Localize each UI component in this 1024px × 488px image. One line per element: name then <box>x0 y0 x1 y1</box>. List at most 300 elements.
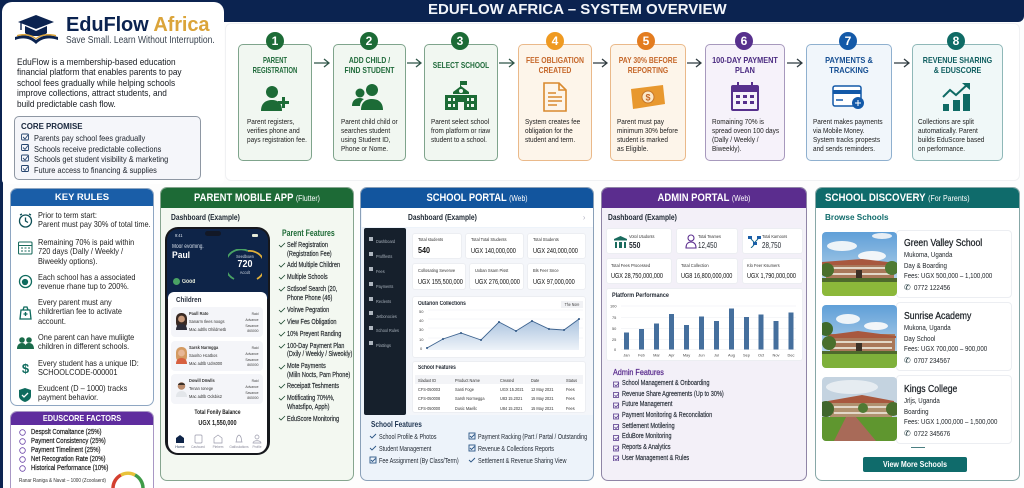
parent feature list: Self Registration <box>287 242 328 249</box>
rule 6 <box>38 358 139 377</box>
school 1 phone: 0772 122456 <box>914 283 950 292</box>
child 2 text: Mac adtlb UdIs000 <box>189 361 222 366</box>
rule 2: 720 days (Dally / Weekly / <box>38 246 123 256</box>
bars and axes: Sep <box>743 352 750 358</box>
column 2: Product Name <box>455 378 480 383</box>
phone notch <box>205 231 221 236</box>
sidebar menu: Dashboard <box>376 239 395 244</box>
bars and axes: 75 <box>612 315 616 320</box>
kpi: total collection: Total Collection <box>681 264 709 269</box>
kpi: collecting revenue <box>412 263 466 290</box>
child 1 amounts: Raid <box>252 311 259 316</box>
browse label: Browse Schools <box>825 212 889 222</box>
step 6 <box>705 32 785 161</box>
core promise heading: CORE PROMISE <box>21 121 83 131</box>
status time: 9:41 <box>175 233 182 238</box>
line chart <box>412 296 586 358</box>
child 2 amounts <box>246 345 259 368</box>
sidebar menu: School Rules <box>376 328 399 333</box>
step 6: 100-DAY PAYMENT <box>712 55 778 65</box>
rule 7 <box>38 384 127 403</box>
dashboard label: Dashboard (Example) <box>408 212 477 222</box>
child 1 amounts: Advance <box>246 317 259 322</box>
school 2 text: Mukona, Uganda <box>904 323 951 332</box>
admin heading: ADMIN PORTAL (Web) <box>658 192 750 204</box>
dashboard label: Dashboard (Example) <box>171 212 240 222</box>
bottom navigation: Plebem <box>213 445 224 449</box>
step 1: REGISTRATION <box>253 65 297 75</box>
school features column 2: Settlement & Revenue Sharing View <box>478 456 566 465</box>
step 6: Romaining 70% is <box>712 117 764 126</box>
kpi: fee kaumers: UGX 1,790,000,000 <box>747 272 796 280</box>
parent feature list: 100-Day Payment Plan <box>287 343 344 350</box>
child 1 text: Sanarm Ilees noogs <box>189 319 224 324</box>
bottom navigation <box>171 432 265 452</box>
sidebar menu: Proflfests <box>376 254 392 259</box>
rule 1: Prior to term start: <box>38 210 97 220</box>
child 1 amounts <box>246 311 259 334</box>
kpi: total collection <box>676 258 738 284</box>
step 7: PAYMENTS & <box>825 55 873 65</box>
bars and axes: 25 <box>612 337 616 342</box>
parent feature list: Volrwe Pegration <box>287 307 329 314</box>
rule 3: revenue rhane tup to 200%. <box>38 281 129 291</box>
icon: document <box>543 82 567 112</box>
step 7: and sends reminders. <box>813 144 875 153</box>
admin features list: Reports & Analytics <box>622 444 671 451</box>
chevron: › <box>583 213 585 222</box>
step 8: on performance. <box>918 144 965 153</box>
admin features list: User Management & Rules <box>622 455 689 462</box>
bars and axes: Jun <box>698 352 705 358</box>
step 6: 6 <box>741 34 747 48</box>
step 1: verifies phone and <box>247 126 300 135</box>
greeting: Moor evoming. <box>172 244 204 250</box>
intro text: improve collections, attract students, and <box>17 88 167 98</box>
kpi: schools: Votol Utudonts <box>629 234 654 239</box>
intro text: school fees gradually while helping schools <box>17 78 175 88</box>
bar chart <box>606 288 803 361</box>
school 2 text: Sunrise Academy <box>904 311 971 322</box>
icon: school building <box>445 81 477 110</box>
dashboard bar <box>362 208 593 227</box>
column 3: U84 15.2021 <box>500 406 522 411</box>
dashboard label: Dashboard (Example) <box>608 212 677 222</box>
core promise list: Schools receive predictable collections <box>34 144 161 154</box>
icon: check boxes <box>21 134 29 172</box>
school portal heading: SCHOOL PORTAL (Web) <box>426 192 527 204</box>
kpi: fee kaumers: Klo Feer Ksumers <box>747 264 780 269</box>
bars and axes: Aug <box>728 352 735 358</box>
step 2: FIND STUDENT <box>345 65 394 75</box>
eduscore heading <box>11 412 153 425</box>
parent feature list: Add Multiple Children <box>287 262 340 269</box>
photo: kings college <box>822 377 897 441</box>
factor list: Despslt Comaltance (25%) <box>31 429 101 436</box>
school 3 text: Fees: UGX 1,000,000 – 1,500,000 <box>904 417 997 426</box>
child 3 amounts: Savance <box>246 390 259 395</box>
factor list: Payment Consistency (25%) <box>31 438 106 445</box>
child card 1 <box>171 307 263 337</box>
parent feature list: Multiple Schools <box>287 274 328 281</box>
kpi: fee since: UGX 97,000,000 <box>533 277 575 286</box>
chart title: Outarion Collections <box>418 301 466 307</box>
step 2: using Student ID, <box>341 135 391 144</box>
rule 3 <box>38 272 136 291</box>
icon: calendar <box>731 82 759 111</box>
school features column 2: Payment Racking (Part / Partal / Outstanding <box>478 432 587 441</box>
kpi: fee since <box>527 263 586 290</box>
bars and axes: Nov <box>773 352 780 358</box>
feature check marks <box>278 241 286 421</box>
kpi: total students value: Total Total Students <box>471 238 507 243</box>
sidebar icons <box>369 237 374 347</box>
parent feature list: 10% Preyent Randing <box>287 331 341 338</box>
step 7: System tracks propests <box>813 135 880 144</box>
table title: School Features <box>418 365 456 371</box>
kpi: collecting revenue: UGX 155,500,000 <box>418 277 463 286</box>
step 6: spread oveon 100 days <box>712 126 779 135</box>
step 5: as Eligible. <box>617 144 648 153</box>
panel: school discovery <box>815 187 1020 481</box>
column 4 <box>531 376 554 413</box>
rule 4: account. <box>38 316 66 326</box>
kpi: kamoors: Total Karnoors <box>762 234 787 239</box>
school 2 text: Day School <box>904 334 935 342</box>
rule 1 <box>38 210 151 229</box>
family balance: Total Fonily Balance <box>195 409 240 416</box>
eduscore heading: EDUSCORE FACTORS <box>43 413 121 423</box>
avatar 3 <box>175 380 188 397</box>
child 2 text <box>189 344 222 368</box>
bars and axes: Mar <box>653 352 661 358</box>
kpi: urban pool <box>469 263 524 290</box>
child 2 amounts: Savance <box>246 357 259 362</box>
step 5: 5 <box>643 34 649 48</box>
step 7: Parent makes payments <box>813 117 883 126</box>
phone screen top <box>167 229 268 299</box>
column 4: 15 May 2021 <box>531 406 554 411</box>
discovery heading: SCHOOL DISCOVERY (For Parents) <box>825 192 970 204</box>
column 3: Created <box>500 378 514 383</box>
bottom navigation: Home <box>175 445 185 449</box>
child 2 amounts: Raid <box>252 345 259 350</box>
rule 5: children in different schools. <box>38 341 129 351</box>
admin features list: EduBore Monitoring <box>622 433 672 440</box>
step 2: searches student <box>341 126 390 135</box>
step 5: student is marked <box>617 135 668 144</box>
panel: core promise <box>14 116 201 180</box>
left edge strip <box>0 0 3 488</box>
parent feature list: Receipatt Teshments <box>287 383 339 390</box>
child card 3 <box>171 374 263 404</box>
core promise list <box>34 133 168 174</box>
step 1: pays registration fee. <box>247 135 307 144</box>
key rules heading: KEY RULES <box>55 192 109 203</box>
step 1: Parent registers, <box>247 117 294 126</box>
panel: parent mobile app <box>160 187 354 481</box>
rule 3: Each school has a associated <box>38 272 136 282</box>
child 3 text: Mac adtlb Odsbis2 <box>189 394 222 399</box>
children heading: Children <box>176 295 201 304</box>
child 3 text: Dowill Döwlls <box>189 378 215 383</box>
child 2 text: Saorito Hcatbos <box>189 353 217 358</box>
step 2: 2 <box>366 34 372 48</box>
view more button <box>863 457 967 472</box>
school 3 text: Jrljs, Uganda <box>904 396 940 405</box>
step 8: REVENUE SHARING <box>923 55 992 65</box>
area line graph <box>413 303 587 353</box>
child 3 amounts <box>246 378 259 401</box>
step 2 <box>333 32 406 161</box>
admin features list: Future Management <box>622 401 672 408</box>
school 3 text: Kings College <box>904 384 957 395</box>
icon: revenue share <box>18 274 32 288</box>
photo: green valley <box>822 232 897 296</box>
kpi: teachers: Total Teames <box>698 234 721 239</box>
area line graph: 40 <box>419 318 424 323</box>
parent feature list: View Fes Obligation <box>287 319 337 326</box>
school 3 phone: 0722 345676 <box>914 429 950 438</box>
kpi: schools: 550 <box>629 241 640 250</box>
child 3 amounts: Advance <box>246 384 259 389</box>
rule 2: Biweekly options). <box>38 256 97 266</box>
icon: clock <box>18 213 32 228</box>
area line graph: 30 <box>419 327 424 332</box>
school 1 text: Day & Boarding <box>904 260 947 270</box>
title bar <box>0 0 1024 22</box>
step 1: PARENT <box>263 55 287 65</box>
rule 6: Every student has a unique ID: <box>38 358 139 368</box>
area line graph: 50 <box>419 309 424 314</box>
step 4: student and term. <box>525 135 575 144</box>
panel: key rules <box>10 188 154 406</box>
content area <box>407 228 593 415</box>
bars and axes: 50 <box>612 326 617 331</box>
bars and axes: Jan <box>623 352 630 358</box>
kpi: total students value: UGX 140,000,000 <box>471 246 516 255</box>
bottom navigation: Gatliculations <box>229 445 249 449</box>
kpi: schools <box>606 228 672 254</box>
school features column 1: Student Management <box>379 444 431 453</box>
chart filter: The Nore <box>565 302 579 307</box>
child 1 text: Paull Rato <box>189 311 208 316</box>
step 5: minimum 30% before <box>617 126 678 135</box>
child 2 amounts: Advance <box>246 351 259 356</box>
admin features heading: Admin Features <box>613 368 664 377</box>
bars and axes <box>606 289 802 361</box>
icon: network <box>748 235 761 248</box>
kpi: total collection: UG8 16,800,000,000 <box>681 272 732 280</box>
rule 5: One parent can have muliigte <box>38 332 134 342</box>
rule 5 <box>38 332 134 351</box>
sidebar menu: Payments <box>376 284 393 289</box>
icon: banknote: $ <box>645 92 651 102</box>
school 1 text: Fees: UGX 500,000 – 1,100,000 <box>904 271 992 280</box>
icon: calendar <box>18 242 33 254</box>
phone screen lower <box>168 292 267 453</box>
child 1 text: Mac adtlls Ohildmetb <box>189 327 226 332</box>
school features heading: School Features <box>371 419 422 429</box>
admin heading <box>602 188 806 208</box>
kpi: collecting revenue: Collosating Sevenve <box>418 269 455 274</box>
factor list <box>31 428 108 473</box>
brand name: EduFlow Africa <box>66 14 209 36</box>
step 8: Collections are split <box>918 117 974 126</box>
admin features list <box>622 379 724 464</box>
column 1: CFS-050003 <box>418 387 440 392</box>
panel: brand and intro <box>2 2 224 184</box>
rule 2 <box>38 237 134 266</box>
sidebar <box>364 228 406 415</box>
kpi: kamoors <box>742 228 803 254</box>
icon: graduation cap and book logo <box>15 15 58 44</box>
step 2: ADD CHILD / <box>349 55 390 65</box>
step 1: 1 <box>272 34 278 48</box>
child 1 amounts: 865000 <box>248 328 259 333</box>
step 3 <box>424 32 498 161</box>
score value: 720 <box>237 259 253 270</box>
kpi: total fees: UGX 240,000,000 <box>533 246 578 255</box>
kpi: teachers: 12,450 <box>698 241 717 250</box>
avatar 1 <box>175 313 188 330</box>
step 5: Parent must pay <box>617 117 664 126</box>
step 2: Parent child child or <box>341 117 398 126</box>
rule 7: payment behavior. <box>38 392 98 402</box>
rule 4: Every parent must any <box>38 297 112 307</box>
kpi: total fees: Total Students <box>533 238 559 243</box>
icon: growth chart <box>942 83 970 111</box>
parent feature list: Motificating 70%%, <box>287 395 334 402</box>
rule 6: SCHOOLCODE-000001 <box>38 367 117 377</box>
area line graph: 0 <box>420 346 423 351</box>
good status: Good <box>182 279 195 285</box>
parent feature list: Whatsfipo, Apph) <box>287 404 330 411</box>
admin features list: Settlement Motilering <box>622 423 675 430</box>
view more button: View More Schools <box>883 460 947 469</box>
arrow <box>687 58 702 68</box>
column 1 <box>418 376 440 413</box>
step 1 <box>238 32 312 161</box>
school 2 phone: 0707 234567 <box>914 356 950 365</box>
step 3: 3 <box>457 34 463 48</box>
sidebar menu <box>376 235 399 354</box>
core promise list: Future access to financing & supplies <box>34 164 157 174</box>
bars and axes: Oct <box>758 352 765 358</box>
icon: banknote <box>631 85 665 109</box>
kpi: fees processed <box>606 258 672 284</box>
intro text: financial platform that enables parents to pay <box>17 67 182 77</box>
icon: family <box>17 337 34 349</box>
user name: Paul <box>172 250 190 261</box>
column 5: Fees <box>566 406 575 411</box>
step 4: obligation for the <box>525 126 573 135</box>
icon: parent and child <box>352 84 383 110</box>
step 6: (Dally / Weekly / <box>712 135 759 144</box>
icon: fee bag <box>19 306 32 320</box>
step 3: Parent select school <box>431 117 489 126</box>
step 5: PAY 30% BEFORE <box>619 55 677 65</box>
panel: admin portal <box>601 187 807 481</box>
parent feature list: (Miiln Nocts, Pam Phone) <box>287 372 350 379</box>
kpi: total students value <box>465 233 524 259</box>
school card: green valley <box>896 230 1012 298</box>
rule 4: childrertian fee to activate <box>38 306 122 316</box>
area line graph: 10 <box>419 337 424 342</box>
factor list: Historical Performance (10%) <box>31 465 108 472</box>
column 3: UGX 15.2021 <box>500 387 524 392</box>
bars and axes: Apr <box>668 352 675 358</box>
step 8: automatically. Parent <box>918 126 978 135</box>
bars and axes: 100 <box>610 304 617 308</box>
admin features list: Revenue Share Agreements (Up to 30%) <box>622 391 724 398</box>
bar chart title: Platform Performance <box>612 292 669 299</box>
child 2 text: Sarsk Narmgga <box>189 345 218 350</box>
school features column 1: Fee Assignment (By Class/Term) <box>379 456 459 465</box>
arrow <box>314 58 330 68</box>
step 7: via Mobile Money. <box>813 126 865 135</box>
column 2: Dusic Maellc <box>455 406 477 411</box>
kpi: fee since: Bls Feer Snce <box>533 269 559 274</box>
column 3: U83 15.2021 <box>500 396 522 401</box>
kpi: fees processed: UGX 28,750,000,000 <box>611 272 663 280</box>
child 3 text: Tenan Ionege <box>189 386 213 391</box>
column 5: Fees <box>566 396 575 401</box>
school 3 text: Boarding <box>904 406 929 416</box>
icon: phone: ✆ <box>904 283 911 292</box>
step 5 <box>610 32 686 161</box>
school 3 text <box>904 383 997 428</box>
bottom navigation: Cashcard <box>191 445 205 449</box>
step 4: 4 <box>552 34 558 48</box>
panel: school portal <box>360 187 594 481</box>
column 3 <box>500 376 524 413</box>
family balance <box>179 408 256 428</box>
step 8: builds EduScore based <box>918 135 984 144</box>
bars and axes: Dec <box>788 352 795 358</box>
parent feature list: Mote Payments <box>287 363 326 370</box>
column 5 <box>566 376 577 413</box>
column 2 <box>455 376 485 413</box>
factor list: Net Recogration Rate (20%) <box>31 456 105 463</box>
step 3: from platform or riaw <box>431 126 490 135</box>
features heading: Parent Features <box>282 228 335 238</box>
arrow <box>787 58 803 68</box>
table header row <box>415 375 583 384</box>
bottom navigation: Profile <box>252 445 262 449</box>
school 2 text <box>904 310 987 354</box>
bars and axes: Feb <box>638 352 645 358</box>
kpi: total students: Total students <box>418 238 443 243</box>
sidebar menu: Jetbonocies <box>376 314 397 319</box>
chart filter <box>561 301 583 308</box>
school 1 text: Mukoma, Uganda <box>904 250 952 259</box>
score label: Seedbown <box>236 254 254 259</box>
icon: person <box>685 234 697 249</box>
step 3: student to a school. <box>431 135 487 144</box>
step 8: 8 <box>953 34 959 48</box>
column 5: Fees <box>566 387 575 392</box>
icon: school <box>614 235 627 249</box>
column 5: Status <box>566 378 577 383</box>
intro text: build predictable cash flow. <box>17 99 116 109</box>
step 4: System creates fee <box>525 117 580 126</box>
child 3 amounts: 865000 <box>248 395 259 400</box>
score note: Ranar Raniga & Navat – 1000 (Zcoolaerd) <box>19 478 106 484</box>
kpi: urban pool: Uxban Ssam Pisst <box>475 269 508 274</box>
rule 1: Parent must pay 30% of total time. <box>38 219 151 229</box>
bars and axes: 0 <box>614 347 617 352</box>
